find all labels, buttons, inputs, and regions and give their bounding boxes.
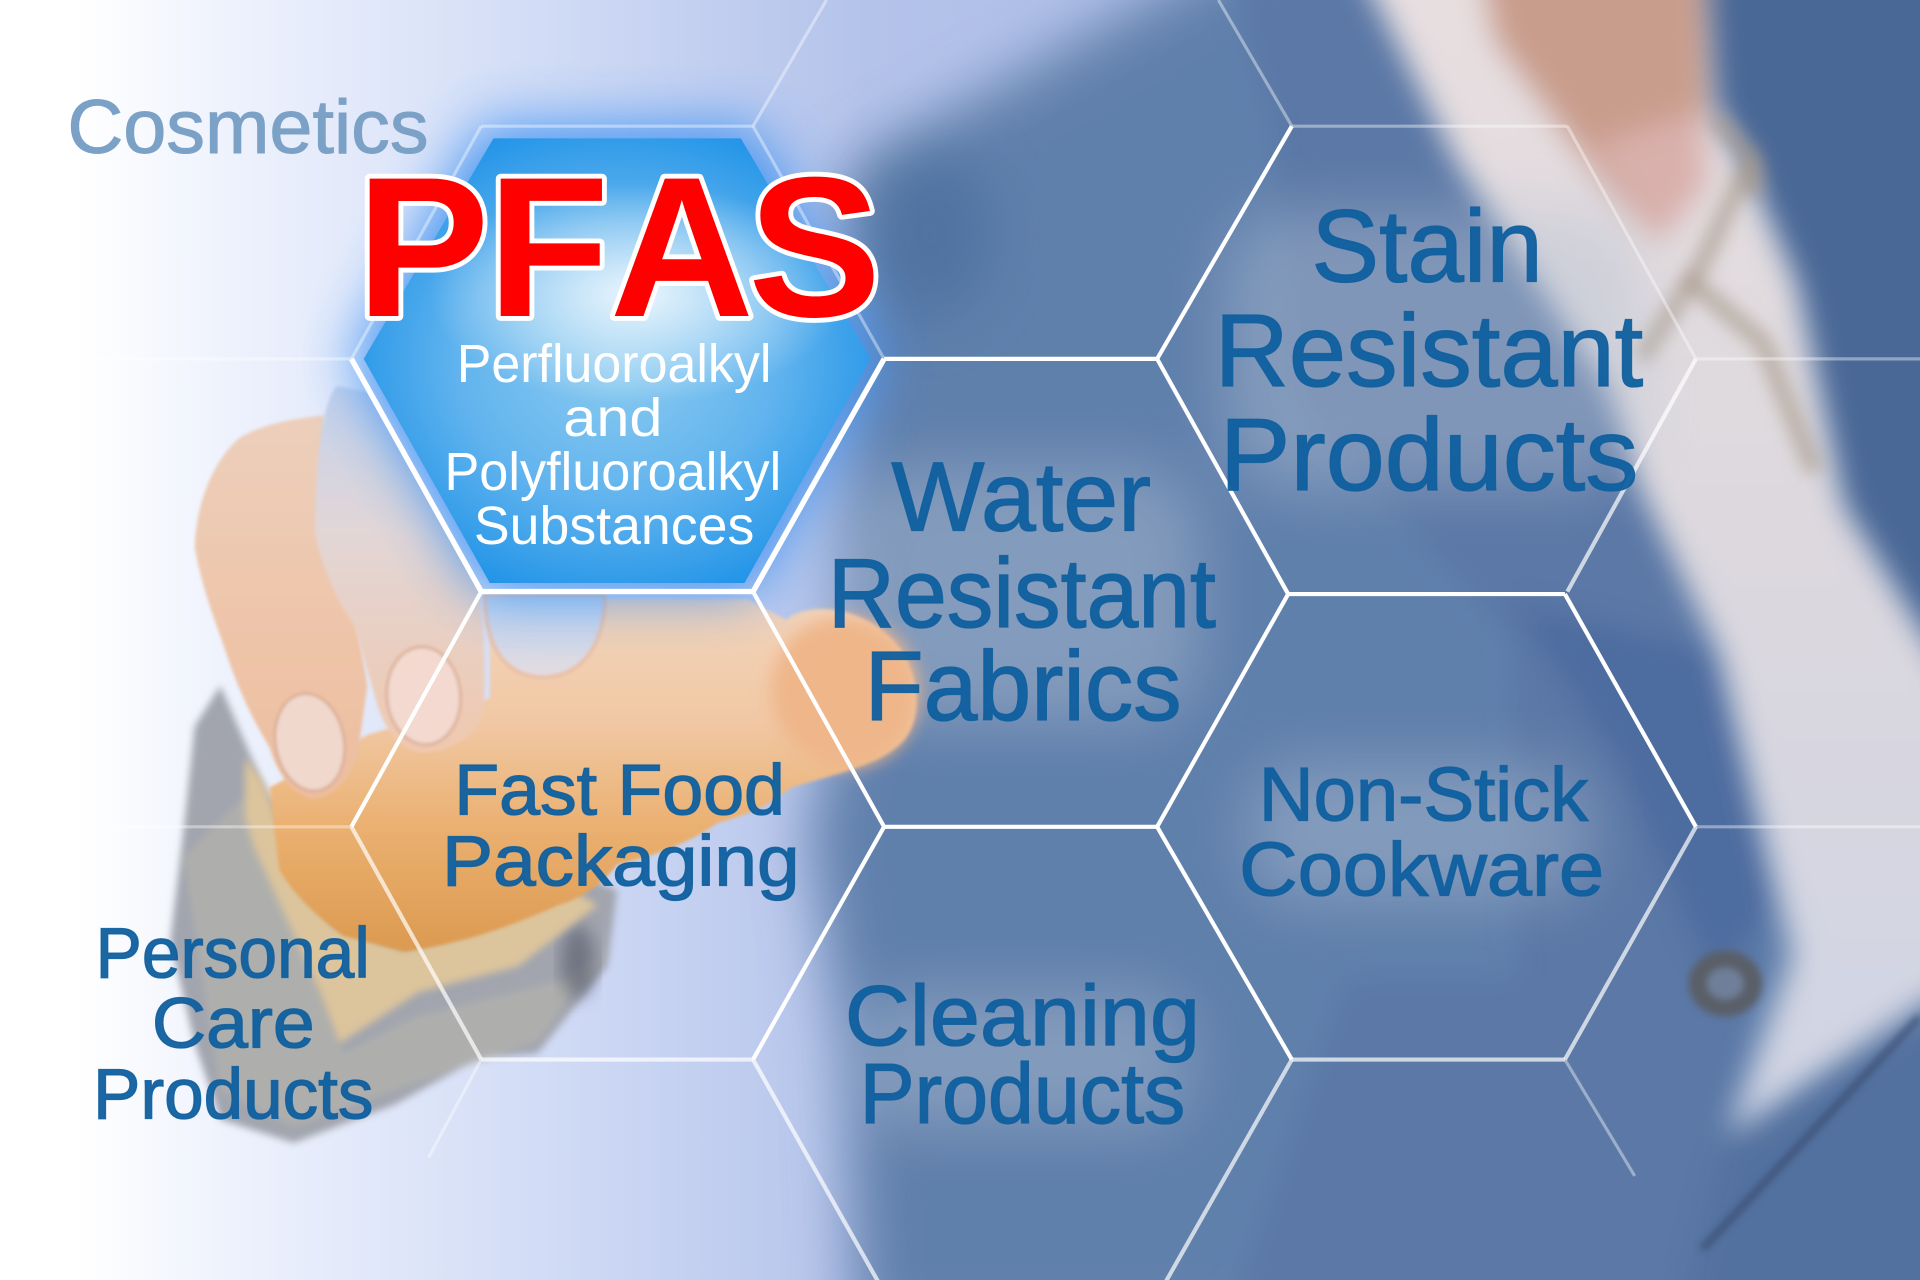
label: Water Resistant Fabrics: Resistant bbox=[828, 538, 1216, 648]
lower right jacket panel bbox=[1678, 943, 1920, 1280]
collar and cord bbox=[1641, 116, 1815, 472]
label: Non-Stick Cookware: Cookware bbox=[1239, 827, 1604, 912]
label: Fast Food Packaging: Fast Food bbox=[454, 752, 785, 831]
neck bbox=[1476, 0, 1708, 245]
label: Cleaning Products bbox=[845, 968, 1200, 1142]
label: Stain Resistant Products: Stain bbox=[1311, 189, 1543, 304]
blurred businessman in suit bbox=[808, 0, 1920, 1280]
jacket bbox=[808, 0, 1920, 1280]
label: Personal Care Products: Personal bbox=[96, 914, 370, 993]
shirt cuff bbox=[245, 757, 598, 1044]
text: PFAS definition: Perfluoroalkyl bbox=[457, 334, 771, 394]
fingernails bbox=[268, 688, 352, 796]
label: Personal Care Products: Products bbox=[93, 1055, 373, 1134]
label: Stain Resistant Products bbox=[1215, 189, 1643, 512]
label: Fast Food Packaging bbox=[442, 752, 800, 902]
label: Stain Resistant Products: Products bbox=[1220, 397, 1638, 512]
label: Water Resistant Fabrics: Fabrics bbox=[864, 631, 1182, 741]
sleeve bbox=[170, 686, 617, 1143]
label: Non-Stick Cookware: Non-Stick bbox=[1259, 753, 1589, 838]
text: PFAS definition: Substances bbox=[474, 496, 754, 556]
palm and wrist bbox=[269, 599, 916, 952]
pale halos behind suit labels bbox=[845, 208, 1641, 1127]
thumb tip bbox=[750, 596, 940, 789]
glow around central hexagon bbox=[351, 126, 884, 592]
dark shading beside central hexagon bbox=[869, 147, 992, 318]
label: Non-Stick Cookware bbox=[1239, 753, 1604, 912]
heading: PFAS: PFAS bbox=[356, 136, 881, 359]
jacket dark seam bbox=[1702, 1017, 1920, 1249]
label: Fast Food Packaging: Packaging bbox=[442, 823, 800, 902]
arm and hand pressing the hexagon bbox=[170, 386, 940, 1143]
label: Water Resistant Fabrics: Water bbox=[891, 441, 1151, 551]
central blue hexagon bbox=[351, 138, 884, 592]
text: PFAS definition: and bbox=[563, 388, 662, 448]
right jacket panel bbox=[1704, 0, 1920, 735]
label: Cleaning Products: Cleaning bbox=[845, 968, 1200, 1064]
text: PFAS definition: Polyfluoroalkyl bbox=[444, 442, 781, 502]
outer finger bbox=[195, 415, 367, 799]
label: Personal Care Products: Care bbox=[152, 984, 315, 1063]
text: PFAS definition bbox=[444, 334, 781, 556]
label: Stain Resistant Products: Resistant bbox=[1215, 293, 1643, 408]
jacket button bbox=[1689, 951, 1762, 1017]
label: Cleaning Products: Products bbox=[860, 1046, 1185, 1142]
middle finger bbox=[315, 386, 485, 752]
pointing fingertip bbox=[485, 595, 605, 677]
shirt bbox=[1352, 0, 1920, 1135]
label: Cosmetics: Cosmetics bbox=[67, 85, 429, 170]
label: Personal Care Products bbox=[93, 914, 373, 1134]
label: Water Resistant Fabrics bbox=[828, 441, 1216, 741]
